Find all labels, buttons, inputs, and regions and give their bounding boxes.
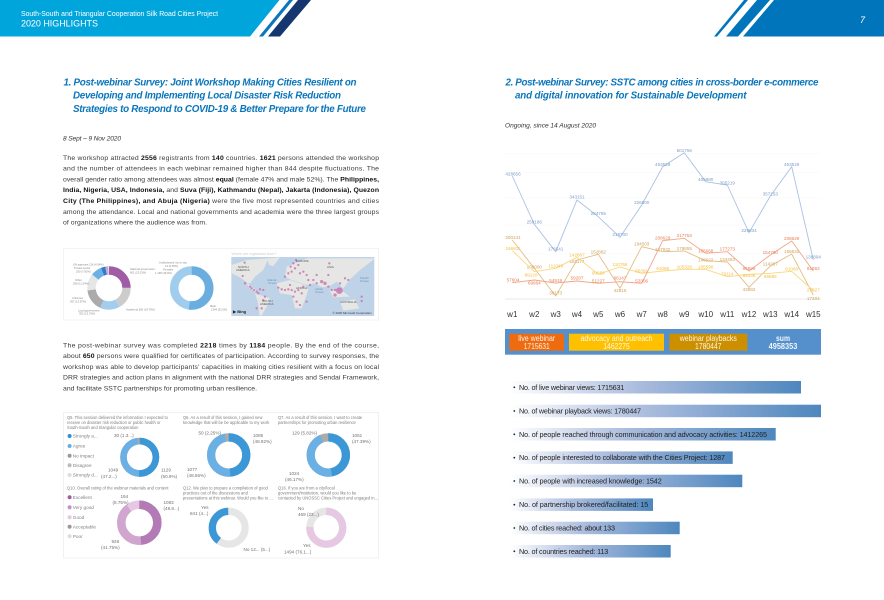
series: advocacy (tan): 43892: [743, 287, 756, 292]
chart: Q6: 50 (2.25%): [198, 430, 221, 436]
labels: gender donut: 14 (0.55%): [165, 264, 178, 268]
series: webinar playbacks (blue): 357153: [763, 192, 778, 196]
total: live webinar: live webinar: [518, 334, 555, 343]
bar: countries reached: [510, 545, 671, 558]
series: advocacy (tan): 184503: [634, 242, 650, 246]
chart: Q7: partnerships for promoting urban resilience: [278, 420, 357, 425]
series: outreach (red): 53306: [635, 278, 649, 284]
labels: organization type donut: 601 (23.51%): [130, 270, 146, 274]
header: right banner with page number: [714, 0, 884, 36]
total: sum: sum: [776, 334, 790, 343]
series: advocacy (tan): 108000: [527, 264, 542, 269]
chart: Q10: 194: [120, 494, 129, 499]
total: live webinar: 1715631: [524, 342, 550, 351]
bar: cities reached: [510, 522, 680, 534]
chart: Q16: 1494 (76.1...): [284, 550, 312, 554]
chart: Q7: 129 (5.82%): [292, 430, 317, 436]
series: live (yellow): 86391: [635, 269, 649, 274]
labels: organization type donut: Private sector: [74, 266, 91, 270]
text block: post-webinar survey results: [62, 342, 379, 393]
series: webinar playbacks (blue): 258186: [527, 220, 542, 224]
map: where registrants are from: AMERICA: [260, 302, 274, 306]
chart: Q13: [183, 486, 273, 552]
chart: Q6: Q6. As a result of this session, I gained new: [183, 415, 262, 420]
axis: week labels: w3: [550, 310, 561, 319]
text block: post-webinar survey results: The post-webinar survey was completed 2218 times by 1184 people. By the end of the course,: [63, 342, 379, 349]
series: live (yellow): 91068: [656, 266, 670, 271]
series: live (yellow): 89120: [525, 272, 538, 278]
series: live (yellow): 105590: [698, 264, 714, 270]
map: where registrants are from: Pacific: [360, 276, 369, 280]
chart: Q10: (48.8...): [164, 506, 180, 511]
series: advocacy (tan): 200141: [505, 235, 521, 240]
series: outreach (red): 208629: [655, 236, 671, 240]
bar: partnerships brokered: No. of partnership brokered/facilitated: 15: [519, 500, 648, 509]
bar: people reached: No. of people reached through communication and advocacy activities: 1412265: [519, 430, 767, 439]
chart: Q5: (47.2...): [101, 474, 117, 479]
chart: Q5: Agree: [73, 444, 86, 449]
series: outreach (red): 154760: [763, 250, 778, 255]
series: advocacy (tan): [505, 235, 820, 301]
labels: gender donut: [155, 260, 227, 312]
labels: gender donut: Undisclosed/ not to say: [159, 260, 187, 264]
chart: Q16: 469 (23...): [298, 512, 319, 517]
chart: Q5: 1049: [108, 468, 119, 472]
bar: increased knowledge: [510, 475, 742, 487]
series: live (yellow): 111049: [548, 264, 563, 268]
labels: gender donut: 1344 (52.5%): [211, 308, 227, 312]
map: where registrants are from: SOUTH: [262, 299, 272, 303]
total: sum: [769, 334, 798, 351]
series: webinar playbacks (blue): 218700: [612, 232, 628, 237]
series: live (yellow): 91068: [785, 266, 799, 272]
labels: organization type donut: [70, 262, 155, 316]
series: outreach (red): 165668: [698, 248, 714, 254]
series: webinar playbacks (blue): 428656: [505, 172, 521, 176]
series: webinar playbacks (blue): 453529: [655, 162, 671, 167]
chart: Q5: Disagree: [73, 463, 92, 468]
axis: week labels: w2: [528, 310, 540, 319]
series: webinar playbacks (blue): 501756: [677, 148, 692, 153]
series: outreach (red): 54919: [549, 278, 563, 283]
chart: Q10: Poor: [73, 534, 83, 539]
axis: week labels: w1: [506, 310, 518, 319]
map: where registrants are from: [231, 252, 375, 316]
panel: survey donut charts: [64, 412, 378, 558]
series: outreach (red): [507, 233, 820, 286]
heading: section 2: and digital innovation for Sustainable Development: [515, 91, 747, 102]
labels: organization type donut: Academia 505 (19.76%): [126, 308, 155, 312]
chart: Q5: 30 (1.3...): [114, 433, 134, 438]
labels: organization type donut: 357 (13.97%): [70, 299, 86, 303]
total: webinar playbacks: 1780447: [695, 342, 722, 351]
series: advocacy (tan): 17204: [807, 296, 820, 301]
header: left banner: 2020 HIGHLIGHTS: [21, 18, 98, 28]
header: right banner with page number: 7: [860, 15, 866, 25]
series: advocacy (tan): 181177: [570, 259, 585, 264]
text block: workshop summary: India, Nigeria, USA, Indonesia, and Suva (Fiji), Kathmandu (Nepal), Jakarta (Indonesia), Quezon: [63, 187, 379, 194]
text block: workshop summary: of organizations where the audience was from.: [63, 220, 207, 227]
map: where registrants are from: Ocean: [268, 281, 277, 285]
labels: gender donut: Females: [163, 268, 174, 272]
chart: Q13: 841 (4...): [190, 511, 209, 516]
text block: workshop summary: City (The Philippines), and Abuja (Nigeria) were the five most represented countries and cities: [63, 198, 380, 205]
series: webinar playbacks (blue): 136894: [806, 254, 821, 260]
series: webinar playbacks (blue): [505, 148, 821, 260]
series: webinar playbacks (blue): 453529: [784, 162, 800, 167]
total: sum: 4958353: [769, 342, 798, 351]
chart: Q16: No: [298, 506, 304, 511]
heading: section 1: 1. Post-webinar Survey: Joint Workshop Making Cities Resilient on: [64, 77, 357, 88]
labels: organization type donut: 200 (7.82%): [76, 269, 91, 273]
series: live (yellow): 79114: [721, 272, 734, 276]
text block: post-webinar survey results: DRR strategies and action plans in alignment with the national DRR strategies and Sendai Framework,: [63, 375, 379, 382]
labels: gender donut: 1 198 (46.9%): [155, 271, 172, 275]
date: section 2: Ongoing, since 14 August 2020: [505, 122, 596, 129]
map: where registrants are from: NORTH: [238, 265, 249, 269]
chart: Q6: (48.56%): [187, 473, 206, 478]
axis: week labels: [506, 310, 821, 319]
labels: organization type donut: 290 (11.34%): [73, 281, 89, 285]
series: advocacy (tan): 167932: [655, 247, 671, 252]
text block: post-webinar survey results: workshop was able to develop participants' capacities in making cities resilient with a focus on local: [62, 364, 379, 371]
map: where registrants are from: Atlantic: [267, 278, 277, 282]
chart: Q6: (48.92%): [253, 439, 272, 444]
series: webinar playbacks (blue): 176541: [548, 246, 564, 252]
labels: organization type donut: Local government: [78, 308, 100, 312]
total: advocacy and outreach: [569, 334, 664, 351]
chart: Q6: 1085: [253, 433, 264, 438]
bar: live webinar views: [510, 381, 801, 394]
series: advocacy (tan): 165832: [784, 249, 800, 254]
chart: Q10: Good: [73, 515, 85, 520]
chart: Q7: (47.39%): [352, 439, 371, 444]
series: outreach (red): 66147: [614, 276, 627, 280]
list: key results bars: [510, 381, 821, 558]
chart: Q10: Acceptable: [73, 524, 96, 529]
chart: Q13: Yes: [201, 505, 209, 510]
series: live (yellow): 110766: [612, 262, 628, 267]
chart: Q5: Strongly d...: [73, 473, 98, 478]
chart: Q13: presentations at this webinar. Would you like to ...: [183, 496, 273, 500]
chart: Q16: Q16. If you are from a city/local: [278, 486, 335, 490]
axis: week labels: w6: [614, 310, 626, 319]
chart: Q10: (8.75%): [112, 500, 129, 505]
map: where registrants are from: Indian: [315, 287, 324, 291]
summary bar: totals: [505, 329, 821, 355]
heading: section 1: Developing and Implementing Local Disaster Risk Reduction: [73, 91, 341, 102]
map: where registrants are from: Ocean: [315, 290, 324, 294]
chart: Q5: South-South and triangular cooperation: [67, 425, 139, 430]
chart: Q16: Yes: [303, 543, 311, 548]
chart: Q7: 1024: [289, 471, 300, 476]
text block: workshop summary: overall gender ratio among attendees was almost equal (female 47% and male 52%). The Philippines,: [63, 176, 379, 183]
map: where registrants are from: AMERICA: [236, 268, 250, 272]
series: advocacy (tan): 30173: [549, 290, 563, 296]
bar: partnerships brokered: [510, 498, 653, 511]
chart: Q16: government/institution, would you like to be: [278, 490, 357, 496]
text block: workshop summary: and the number of attendees in each webinar remained higher than 844 despite fluctuations. The: [63, 166, 379, 173]
bar: people reached: [510, 428, 776, 440]
chart: Q16: [278, 486, 378, 554]
chart: Q10: Very good: [73, 505, 94, 510]
chart: Q10: Q10. Overall rating of the webinar materials and content: [67, 486, 169, 490]
labels: organization type donut: Unknown: [72, 296, 84, 300]
bar: people interested to collaborate: No. of people interested to collaborate with the Cities Project: 1287: [519, 453, 725, 462]
heading: section 1: Strategies to Respond to COVID-19 & Better Prepare for the Future: [73, 104, 367, 115]
text block: workshop summary: among the attendance. Local and national governments and academia were the three largest groups: [63, 209, 380, 216]
series: webinar playbacks (blue): 284765: [591, 211, 606, 216]
series: live (yellow): 142687: [569, 252, 585, 258]
map: where registrants are from: AFRICA: [296, 286, 307, 290]
total: advocacy and outreach: advocacy and outreach: [580, 334, 652, 343]
series: outreach (red): 95596: [743, 266, 756, 271]
chart: gender donut: [174, 270, 209, 306]
chart: Q5: Q5. This session delivered the information I expected to: [67, 415, 169, 420]
header: left banner: South-South and Triangular Cooperation Silk Road Cities Project: [21, 11, 218, 18]
map: where registrants are from: Where are registrants from?: [232, 252, 276, 256]
chart: Q10: (41.75%): [101, 545, 120, 550]
chart: Q6: 1077: [187, 467, 198, 472]
bar: people interested to collaborate: [510, 451, 733, 464]
chart: Q5: Strongly a...: [73, 434, 98, 439]
text block: post-webinar survey results: about 650 persons were qualified for certificates of participation. According to survey responses, the: [63, 353, 379, 360]
series: advocacy (tan): 42815: [614, 288, 627, 293]
series: live (yellow): 86686: [764, 274, 777, 279]
chart: Q13: No 12... (5...): [244, 547, 271, 552]
heading: section 2: [504, 77, 819, 102]
series: outreach (red): 177273: [720, 246, 735, 252]
map: where registrants are from: Ocean: [360, 279, 369, 283]
total: webinar playbacks: [669, 334, 747, 351]
text block: workshop summary: The workshop attracted 2556 registrants from 140 countries. 1621 persons attended the workshop: [63, 155, 379, 162]
series: advocacy (tan): 152882: [591, 250, 606, 254]
map: where registrants are from: ▶ Bing: [232, 309, 247, 314]
chart: Q5: 1129: [161, 468, 171, 472]
chart: Q7: (46.17%): [285, 477, 304, 482]
map: where registrants are from: ASIA: [327, 265, 334, 269]
chart: Q5: No impact: [73, 453, 95, 458]
chart: Q10: Excellent: [73, 495, 93, 500]
chart: Q6: knowledge that will be be applicable to my work: [183, 420, 270, 425]
chart: Q7: [278, 415, 371, 482]
series: outreach (red): 59287: [571, 276, 584, 280]
chart: Q10: 1083: [164, 500, 174, 505]
chart: Q10: [67, 486, 180, 550]
chart: Q13: Q12. We plan to prepare a compilation of good: [183, 486, 269, 490]
series: outreach (red): 208629: [784, 236, 800, 241]
series: webinar playbacks (blue): 395219: [720, 180, 735, 186]
bar: webinar playback views: [510, 405, 821, 417]
series: live (yellow): 90656: [592, 270, 605, 276]
chart: Q6: [183, 415, 272, 478]
axis: week labels: w9: [678, 310, 690, 319]
labels: organization type donut: 352 (13.76%): [79, 312, 95, 316]
map: where registrants are from: © 2020 Microsoft Corporation: [332, 311, 372, 315]
total: webinar playbacks: webinar playbacks: [679, 334, 737, 343]
chart: Q5: receive on disaster risk reduction or public health or: [67, 420, 161, 425]
labels: organization type donut: UN agencies 116 (4.54%): [73, 262, 104, 266]
axis: week labels: w10: [697, 310, 714, 319]
chart: Q5: [67, 415, 178, 479]
labels: organization type donut: Other: [75, 278, 82, 282]
chart: Q7: 1051: [352, 433, 363, 438]
labels: gender donut: Male: [210, 304, 216, 308]
series: advocacy (tan): 134453: [720, 257, 735, 262]
series: outreach (red): 91863: [807, 266, 820, 271]
axis: week labels: w14: [783, 310, 800, 319]
axis: week labels: w8: [657, 310, 668, 319]
chart: Q5: (50.9%): [161, 474, 178, 479]
chart: organization type donut: [92, 270, 126, 306]
series: outreach (red): 57604: [507, 278, 520, 283]
date: section 1: 8 Sept – 9 Nov 2020: [63, 136, 121, 143]
series: outreach (red): 51227: [592, 278, 605, 284]
series: advocacy (tan): 178655: [677, 246, 692, 251]
axis: week labels: w15: [805, 310, 821, 319]
series: live (yellow): [506, 246, 820, 292]
series: webinar playbacks (blue): 343151: [569, 194, 585, 200]
total: live webinar: [509, 334, 564, 351]
bar: increased knowledge: No. of people with increased knowledge: 1542: [519, 476, 662, 486]
map: where registrants are from: EUROPE: [296, 259, 309, 263]
chart: Q7: Q7. As a result of this session, I want to create: [278, 415, 363, 420]
bar: cities reached: No. of cities reached: about 133: [519, 524, 615, 532]
series: outreach (red): 69964: [528, 280, 541, 286]
heading: section 1: [64, 77, 367, 115]
bar: webinar playback views: No. of webinar playback views: 1780447: [519, 406, 641, 416]
bar: live webinar views: No. of live webinar views: 1715631: [519, 383, 624, 392]
series: webinar playbacks (blue): 229834: [741, 228, 757, 233]
series: live (yellow): 105328: [677, 264, 692, 270]
axis: week labels: w4: [571, 310, 583, 319]
header: left banner: [0, 0, 311, 36]
panel: registrant dashboard: [64, 248, 378, 320]
axis: week labels: w7: [636, 310, 647, 319]
chart: Q10: 926: [112, 539, 120, 544]
series: live (yellow): 27827: [807, 288, 820, 292]
series: outreach (red): 217753: [677, 233, 692, 238]
map: where registrants are from: AUSTRALIA: [340, 300, 357, 304]
chart: Q13: practices out of the discussions and: [183, 490, 249, 496]
axis: week labels: w12: [741, 310, 757, 319]
heading: section 2: 2. Post-webinar Survey: SSTC among cities in cross-border e-commerce: [504, 77, 819, 88]
chart: Q16: contacted by UNOSSC Cities Project and engaged in...: [278, 496, 378, 500]
axis: week labels: w11: [719, 310, 735, 319]
series: advocacy (tan): 114287: [763, 262, 778, 266]
series: webinar playbacks (blue): 405880: [698, 177, 714, 182]
bar: countries reached: No. of countries reached: 113: [519, 547, 608, 556]
series: webinar playbacks (blue): 326800: [634, 200, 650, 205]
text block: post-webinar survey results: and facilitate SSTC partnerships for promoting urban resilience.: [63, 386, 257, 393]
labels: organization type donut: National government: [130, 267, 155, 271]
series: live (yellow): 88436: [743, 273, 756, 278]
text block: workshop summary: [63, 155, 380, 227]
axis: week labels: w13: [762, 310, 778, 319]
axis: week labels: w5: [592, 310, 604, 319]
line chart: weekly views: [505, 148, 821, 319]
series: advocacy (tan): 148622: [698, 258, 714, 262]
total: advocacy and outreach: 1462275: [603, 342, 630, 351]
series: live (yellow): 166911: [506, 246, 521, 251]
